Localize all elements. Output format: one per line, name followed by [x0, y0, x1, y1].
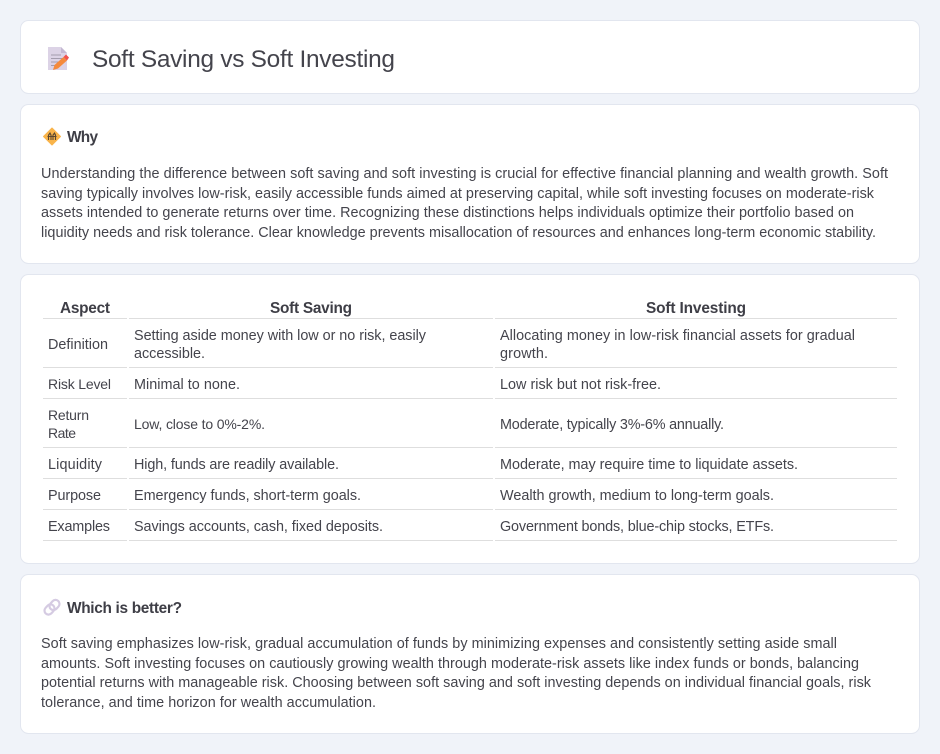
panel: comparison table	[20, 274, 920, 564]
heading: why: Why	[67, 129, 98, 146]
table row: definition: accessible.	[134, 346, 205, 362]
table row: return rate: Rate	[48, 425, 76, 441]
text block: which is better paragraph: potential returns with manageable risk. Choosing between soft saving and soft investing depends on individual financial goals, risk	[41, 675, 872, 691]
table row: definition: Allocating money in low-risk financial assets for gradual	[500, 328, 855, 344]
table row: return rate: Moderate, typically 3%-6% annually.	[500, 417, 724, 433]
text block: which is better paragraph: Soft saving emphasizes low-risk, gradual accumulation of funds by minimizing expenses and consistently setting aside small	[41, 636, 837, 652]
table row: definition: Definition	[48, 337, 108, 353]
table header row	[43, 300, 897, 319]
table row: liquidity: Moderate, may require time to liquidate assets.	[500, 457, 798, 473]
table row: purpose	[43, 488, 897, 510]
text block: which is better paragraph: tolerance, and time horizon for wealth accumulation.	[41, 695, 376, 711]
text block: why paragraph: saving typically involves low-risk, easily accessible funds aimed at preserving capital, while soft investing focuses on moderate-risk	[41, 186, 875, 202]
table row: return rate	[43, 407, 897, 448]
title text: Soft Saving vs Soft Investing	[92, 46, 395, 73]
table header row: Aspect	[60, 300, 110, 317]
table row: purpose: Wealth growth, medium to long-term goals.	[500, 488, 774, 504]
table row: risk level: Low risk but not risk-free.	[500, 377, 661, 393]
panel: which is better	[20, 574, 920, 734]
text block: which is better paragraph	[41, 636, 872, 711]
table row: risk level: Minimal to none.	[134, 377, 240, 393]
text block: why paragraph: Understanding the difference between soft saving and soft investing is crucial for effective financial planning and wealth growth. Soft	[41, 166, 888, 182]
text block: why paragraph: assets intended to generate returns over time. Recognizing these distinctions helps individuals optimize their portfolio based on	[41, 205, 854, 221]
table row: return rate: Low, close to 0%-2%.	[134, 416, 265, 432]
table header row: Soft Investing	[646, 300, 746, 317]
table row: purpose: Emergency funds, short-term goals.	[134, 488, 361, 504]
table row: definition	[43, 328, 897, 368]
panel: title	[20, 20, 920, 94]
table row: examples: Savings accounts, cash, fixed deposits.	[134, 519, 383, 535]
table row: return rate: Return	[48, 407, 89, 423]
heading: which is better: Which is better?	[67, 600, 182, 617]
table row: risk level	[43, 376, 897, 399]
table row: examples	[43, 519, 897, 541]
text block: which is better paragraph: amounts. Soft investing focuses on cautiously growing wealth through moderate-risk assets like index funds or bonds, balancing	[41, 656, 859, 672]
table row: examples: Government bonds, blue-chip stocks, ETFs.	[500, 519, 774, 535]
table row: liquidity: Liquidity	[48, 457, 103, 473]
panel: why	[20, 104, 920, 264]
table row: purpose: Purpose	[48, 488, 101, 504]
icon: link	[43, 598, 61, 616]
table row: definition: growth.	[500, 346, 548, 362]
text block: why paragraph: liquidity needs and risk tolerance. Clear knowledge prevents misallocation of resources and enhances long-term economic stability.	[41, 225, 876, 241]
table row: examples: Examples	[48, 519, 110, 535]
table row: risk level: Risk Level	[48, 376, 111, 392]
table row: liquidity: High, funds are readily available.	[134, 457, 339, 473]
icon: warning diamond	[44, 128, 60, 145]
icon: memo with pencil	[48, 47, 69, 70]
table row: liquidity	[43, 457, 897, 479]
text block: why paragraph	[41, 166, 888, 241]
table header row: Soft Saving	[270, 300, 352, 317]
table row: definition: Setting aside money with low or no risk, easily	[134, 328, 427, 344]
